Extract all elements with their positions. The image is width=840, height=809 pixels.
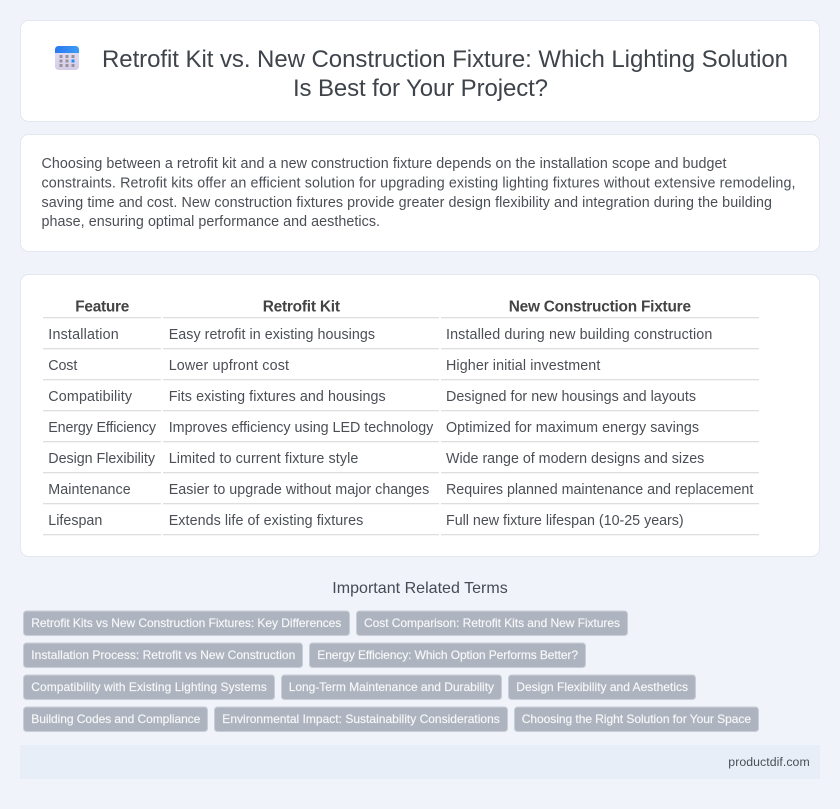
- row: cost: Cost: [48, 358, 77, 374]
- row: design flexibility: Limited to current fixture style: [169, 451, 358, 467]
- icon: calendar: [55, 46, 79, 70]
- related term tags: Environmental Impact: Sustainability Considerations: [222, 712, 500, 726]
- related term tags: [24, 611, 758, 732]
- panel: introduction text: phase, ensuring optimal performance and aesthetics.: [42, 214, 380, 230]
- related term tags: Compatibility with Existing Lighting Systems: [31, 680, 267, 694]
- row: compatibility: Compatibility: [48, 389, 133, 405]
- row: lifespan: Full new fixture lifespan (10-25 years): [446, 513, 684, 529]
- row: design flexibility: [48, 451, 704, 467]
- row: installation: Installed during new building construction: [446, 327, 712, 343]
- row: lifespan: Extends life of existing fixtures: [169, 513, 363, 529]
- row: cost: [48, 358, 600, 374]
- row: compatibility: Designed for new housings and layouts: [446, 389, 696, 405]
- row: installation: Easy retrofit in existing housings: [169, 327, 375, 343]
- related term tags: Choosing the Right Solution for Your Space: [522, 712, 751, 726]
- row: maintenance: Easier to upgrade without major changes: [169, 482, 429, 498]
- footer: [20, 745, 820, 779]
- row: maintenance: [48, 482, 753, 498]
- row: energy efficiency: Improves efficiency using LED technology: [169, 420, 434, 436]
- title: [102, 46, 788, 102]
- row: design flexibility: Wide range of modern designs and sizes: [446, 451, 704, 467]
- row: energy efficiency: Energy Efficiency: [48, 420, 157, 436]
- panel: introduction text: [20, 134, 820, 252]
- heading: related terms: Important Related Terms: [332, 580, 508, 597]
- related term tags: Design Flexibility and Aesthetics: [516, 680, 688, 694]
- table header row: Feature: [75, 298, 130, 316]
- row: maintenance: Maintenance: [48, 482, 131, 498]
- table header row: Retrofit Kit: [263, 298, 340, 316]
- related term tags: Installation Process: Retrofit vs New Construction: [31, 648, 295, 662]
- title: Retrofit Kit vs. New Construction Fixture: Which Lighting Solution: [102, 46, 788, 73]
- related term tags: Retrofit Kits vs New Construction Fixtures: Key Differences: [31, 616, 341, 630]
- row: compatibility: Fits existing fixtures and housings: [169, 389, 386, 405]
- row: energy efficiency: [48, 420, 699, 436]
- panel: introduction text: constraints. Retrofit kits offer an efficient solution for upgrading existing lighting fixtures without extensive remodeling,: [42, 176, 796, 192]
- panel: title header: [20, 20, 820, 122]
- row: maintenance: Requires planned maintenance and replacement: [446, 482, 753, 498]
- panel: introduction text: Choosing between a retrofit kit and a new construction fixture depends on the installation scope and budget: [42, 156, 727, 172]
- title: Is Best for Your Project?: [293, 75, 548, 102]
- footer: productdif.com: [728, 755, 810, 769]
- row: compatibility: [48, 389, 696, 405]
- row: cost: Lower upfront cost: [169, 358, 289, 374]
- row: cost: Higher initial investment: [446, 358, 600, 374]
- row: installation: Installation: [48, 327, 119, 343]
- panel: comparison table: [20, 274, 820, 556]
- table header row: [75, 298, 691, 316]
- related term tags: Energy Efficiency: Which Option Performs Better?: [317, 648, 578, 662]
- row: lifespan: [48, 513, 684, 529]
- table header row: New Construction Fixture: [509, 298, 691, 316]
- panel: introduction text: saving time and cost. New construction fixtures provide greater design flexibility and integration during the building: [42, 195, 772, 211]
- related term tags: Building Codes and Compliance: [31, 712, 201, 726]
- row: installation: [48, 327, 712, 343]
- related term tags: Long-Term Maintenance and Durability: [289, 680, 494, 694]
- row: lifespan: Lifespan: [48, 513, 102, 529]
- related term tags: Cost Comparison: Retrofit Kits and New Fixtures: [364, 616, 620, 630]
- row: design flexibility: Design Flexibility: [48, 451, 156, 467]
- row: energy efficiency: Optimized for maximum energy savings: [446, 420, 699, 436]
